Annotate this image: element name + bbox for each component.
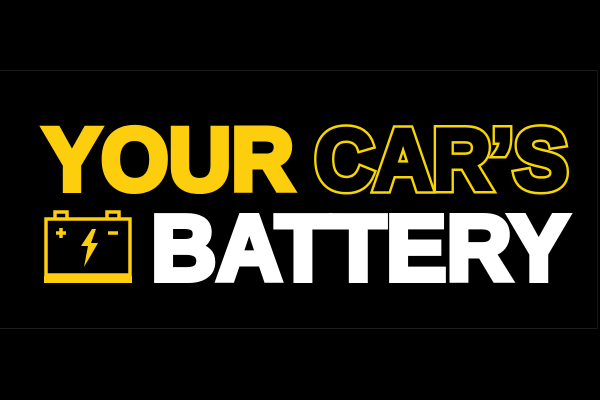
- title: YOUR: YOUR: [43, 109, 294, 209]
- title: CAR'S outlined: CAR’S: [315, 112, 568, 208]
- icon: car battery: [44, 212, 132, 283]
- title: CAR'S outlined: CAR’S: [315, 112, 568, 208]
- title: BATTERY: BATTERY: [151, 196, 569, 300]
